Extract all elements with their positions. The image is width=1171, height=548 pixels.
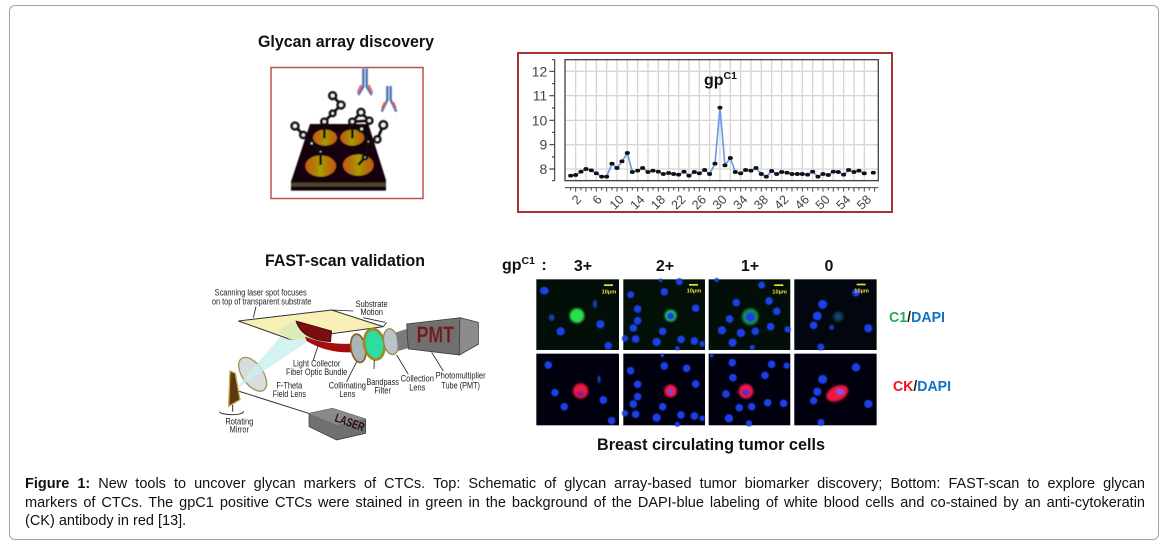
caption — [25, 476, 1145, 529]
legend: C1/DAPI: C1/DAPI — [889, 310, 945, 326]
bandpass filter — [362, 327, 387, 361]
y axis: 8 — [540, 161, 548, 177]
diagram labels: Field Lens — [273, 389, 306, 399]
y axis: 9 — [540, 137, 548, 153]
PMT box — [396, 318, 478, 355]
y axis: 11 — [533, 88, 548, 104]
diagram labels: Tube (PMT) — [441, 380, 480, 390]
scale bars: 10µm — [602, 289, 616, 295]
label: 2+: 2+ — [656, 258, 674, 275]
line chart — [532, 59, 878, 212]
x axis: 10 — [607, 193, 627, 212]
label: 1+: 1+ — [741, 258, 759, 275]
peak label: gpC1: C1 — [724, 70, 737, 82]
x axis: 26 — [689, 193, 709, 212]
x axis: 6 — [590, 193, 605, 207]
heading: Breast circulating tumor cells: Breast circulating tumor cells — [597, 436, 825, 454]
x axis: 34 — [731, 193, 750, 212]
light collector — [296, 321, 332, 342]
light spot on substrate — [277, 320, 312, 339]
caption: (CK) antibody in red [13]. — [25, 513, 186, 529]
fiber bundle — [305, 337, 353, 352]
x axis: 54 — [834, 193, 853, 212]
tumor cells: green C1 staining — [570, 308, 844, 325]
y axis: 12 — [532, 63, 548, 79]
laser box: LASER — [333, 411, 367, 434]
diagram labels: Lens — [409, 382, 426, 392]
scale bars — [602, 284, 869, 295]
laser box — [309, 408, 367, 440]
panel: FAST-scan optical diagram — [212, 288, 486, 440]
DAPI nuclei — [540, 278, 872, 426]
panel: glycan array schematic — [271, 68, 423, 198]
x axis: 22 — [669, 193, 688, 212]
diagram labels: Fiber Optic Bundle — [286, 367, 347, 377]
diagram labels: Collection — [401, 374, 434, 384]
x axis — [565, 188, 878, 212]
diagram labels: Scanning laser spot focuses — [215, 288, 307, 298]
micrograph backgrounds — [536, 279, 877, 425]
heading: Glycan array discovery: Glycan array discovery — [258, 32, 435, 51]
x axis: 38 — [751, 193, 771, 212]
diagram labels: on top of transparent substrate — [212, 296, 311, 306]
light cone — [235, 320, 312, 390]
label: gpC1: C1 — [522, 255, 535, 267]
panel border — [271, 68, 423, 198]
caption: Figure 1: New tools to uncover glycan markers of CTCs. Top: Schematic of glycan array-based tumor biomarker discovery; Bottom: FAST-scan to explore glycan — [25, 476, 1145, 492]
collection lens — [382, 328, 400, 356]
icon: antibody one — [358, 68, 372, 95]
collimating lens — [349, 333, 368, 364]
diagram labels: Filter — [374, 385, 391, 395]
icon: glycan array slide — [291, 92, 387, 191]
label: gpC1: : — [537, 257, 547, 274]
label: 0: 0 — [825, 258, 834, 275]
y axis — [532, 59, 555, 181]
diagram labels: Bandpass — [366, 377, 399, 387]
x axis: 42 — [772, 193, 791, 212]
chart border — [518, 53, 892, 212]
diagram labels: Lens — [339, 389, 356, 399]
legend: CK/DAPI: CK/DAPI — [893, 379, 951, 395]
diagram labels: Light Collector — [293, 359, 340, 369]
label: gpC1: gp — [502, 257, 522, 274]
caption: markers of CTCs. The gpC1 positive CTCs were stained in green in the background of the DAPI-blue labeling of white blood cells and co-stained by an anti-cytokeratin — [25, 494, 1145, 510]
row labels: gpC1 score header — [502, 255, 834, 275]
scale bars: 10µm — [772, 289, 787, 295]
label: 3+: 3+ — [574, 258, 592, 275]
scale bars: 10µm — [687, 289, 701, 295]
F-theta field lens — [233, 353, 272, 396]
substrate — [238, 310, 383, 339]
panel: array line chart — [518, 53, 892, 212]
peak label: gpC1: gp — [704, 72, 724, 89]
x axis: 30 — [710, 193, 730, 212]
diagram labels: F-Theta — [276, 380, 302, 390]
laser beam — [235, 390, 312, 414]
PMT box: PMT — [417, 321, 454, 347]
x axis: 58 — [854, 193, 874, 212]
diagram labels — [212, 288, 486, 434]
x axis: 2 — [569, 193, 584, 207]
x axis: 18 — [648, 193, 668, 212]
diagram labels: Photomultiplier — [436, 370, 486, 380]
x axis: 14 — [628, 193, 647, 212]
heading: FAST-scan validation: FAST-scan validation — [265, 251, 425, 270]
diagram labels: Collimating — [329, 380, 366, 390]
icon: antibody two — [382, 86, 396, 112]
rotating mirror — [220, 371, 243, 415]
leader lines and motion arrows — [253, 307, 443, 382]
diagram labels: Motion — [360, 307, 383, 317]
diagram labels: Substrate — [356, 299, 388, 309]
tumor cells: red CK staining — [573, 382, 851, 405]
diagram labels: Mirror — [230, 424, 249, 434]
y axis: 10 — [532, 112, 548, 128]
data series — [570, 108, 874, 177]
panel: fluorescence micrographs — [536, 278, 877, 426]
scale bars: 10µm — [854, 289, 869, 295]
x axis: 50 — [813, 193, 833, 212]
x axis: 46 — [792, 193, 812, 212]
nuclei inside tumor cells — [577, 388, 844, 396]
diagram labels: Rotating — [225, 416, 253, 426]
